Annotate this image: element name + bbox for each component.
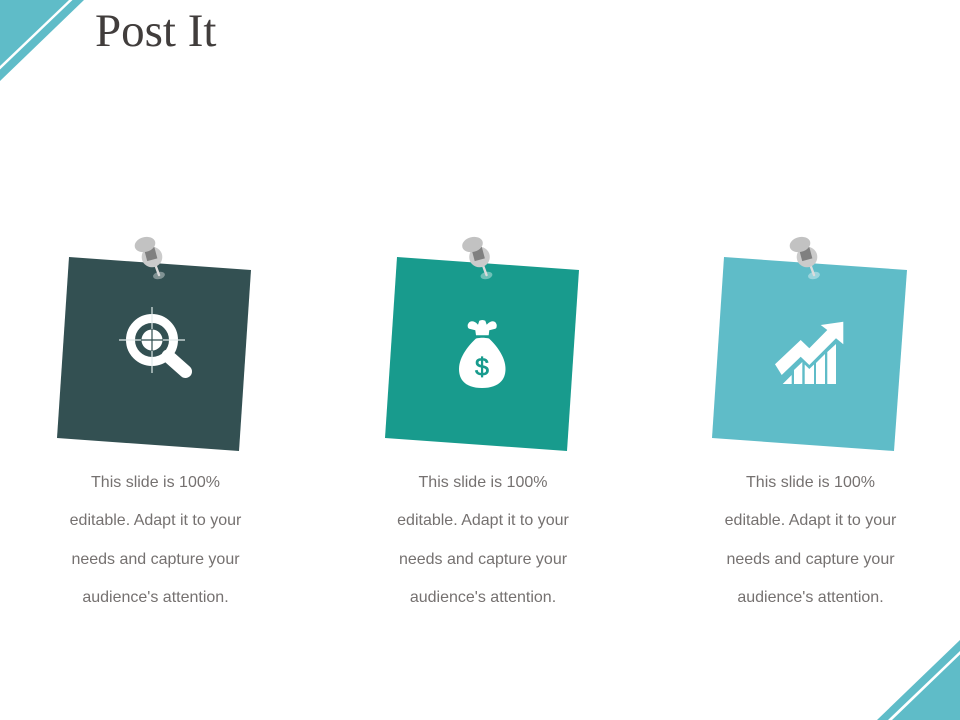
caption: left note: This slide is 100% — [91, 474, 220, 490]
caption: right note: editable. Adapt it to your — [725, 512, 896, 529]
panel: dark note — [57, 235, 251, 451]
bottom-right corner decoration — [877, 640, 960, 720]
caption: left note: needs and capture your — [71, 550, 240, 568]
caption: left note: editable. Adapt it to your — [70, 512, 241, 529]
caption: right note: audience's attention. — [737, 589, 884, 606]
caption: middle note: needs and capture your — [399, 550, 567, 568]
caption: left note — [70, 474, 242, 606]
note paper: light blue — [712, 257, 907, 451]
caption: middle note: editable. Adapt it to your — [397, 512, 569, 529]
caption: left note: audience's attention. — [82, 589, 229, 606]
caption: right note: needs and capture your — [726, 550, 895, 568]
top-left corner decoration — [0, 0, 84, 81]
caption: middle note: audience's attention. — [410, 589, 556, 606]
caption: right note: This slide is 100% — [746, 474, 875, 490]
note paper: green — [385, 257, 579, 451]
title: Post It — [95, 5, 216, 57]
caption: middle note: This slide is 100% — [419, 474, 547, 490]
icon: push pin — [460, 235, 493, 280]
panel: light blue note — [712, 235, 907, 451]
icon: money bag — [459, 320, 506, 388]
icon: magnifier with target — [119, 307, 186, 373]
caption: middle note — [397, 474, 569, 606]
icon: push pin — [133, 235, 166, 280]
note paper: dark — [57, 257, 251, 451]
icon: push pin — [788, 235, 821, 280]
dollar sign: $ — [475, 354, 489, 382]
panel: green note — [385, 235, 579, 451]
icon: growth chart — [775, 322, 843, 384]
caption: right note — [725, 474, 896, 606]
